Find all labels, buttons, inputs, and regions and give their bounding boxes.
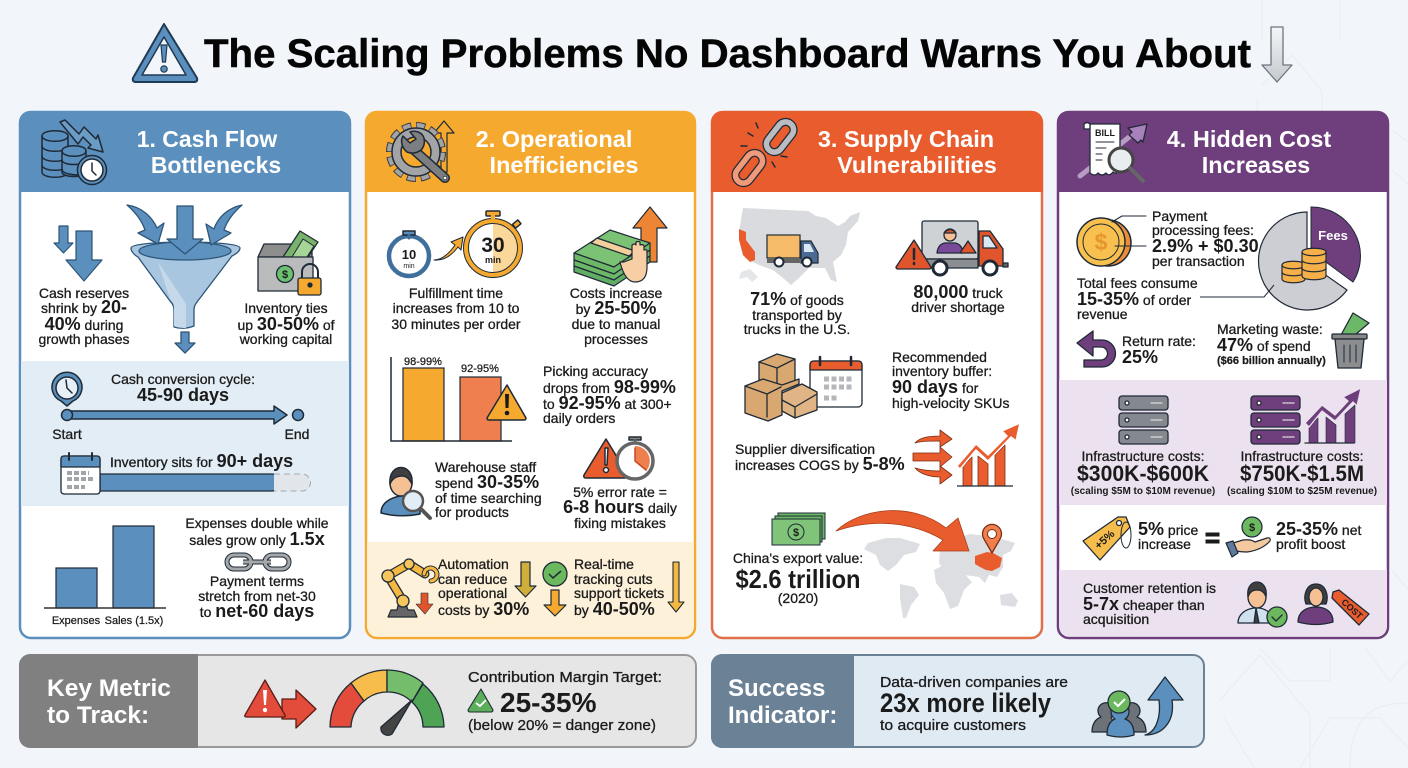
text: infrastructure costs 2: (scaling $10M to $25M revenue) — [1227, 486, 1377, 497]
text: picking accuracy: daily orders — [543, 410, 615, 426]
icon: locked inventory — [258, 231, 321, 295]
text: return rate: Return rate: — [1122, 333, 1196, 349]
text: supplier diversification: increases COGS by 5-8% — [735, 454, 905, 474]
text: real-time tracking: Real-time — [574, 556, 634, 572]
icon: world map — [864, 534, 1018, 618]
heading: cash flow — [137, 126, 281, 178]
text: infrastructure costs 1: (scaling $5M to $10M revenue) — [1071, 486, 1215, 497]
icon: clock pin — [52, 372, 82, 406]
progress bar — [100, 474, 310, 491]
arrow: to china — [836, 511, 969, 551]
text: warehouse staff: for products — [435, 504, 509, 520]
text: infrastructure costs 1 — [1071, 448, 1215, 497]
icon: stopwatches: 10 — [402, 247, 416, 262]
heading: key metric: to Track: — [47, 702, 149, 729]
panel: operational inefficiencies — [365, 111, 696, 638]
text: inventory ties: up 30-50% of — [237, 314, 335, 334]
text: total fees: revenue — [1077, 306, 1128, 322]
text: infrastructure costs 2: $750K-$1.5M — [1240, 461, 1364, 486]
icon: cash stack: $ — [793, 527, 799, 539]
heading: supply chain: Vulnerabilities — [837, 152, 997, 178]
text: danger zone: (below 20% = danger zone) — [468, 717, 656, 734]
icon: stopwatches: min — [485, 255, 501, 265]
text: china export: $2.6 trillion — [736, 564, 860, 594]
icon: calendar — [810, 357, 862, 407]
text: picking accuracy: drops from 98-99% — [543, 377, 676, 397]
timeline labels: End — [285, 426, 309, 442]
icon: server purple with chart — [1251, 388, 1361, 444]
icon: gear and wrench — [390, 121, 454, 180]
icon: coin: $ — [1095, 229, 1108, 255]
text: inventory buffer: inventory buffer: — [892, 363, 992, 379]
text: real-time tracking: tracking cuts — [574, 571, 653, 587]
text: price increase: 5% price — [1138, 519, 1198, 539]
panel: success indicator — [711, 654, 1204, 748]
bar chart: picking accuracy — [391, 356, 512, 441]
icon: map pin — [982, 524, 1002, 553]
text: cash reserves: growth phases — [38, 331, 130, 347]
icon: locked inventory: $ — [282, 269, 288, 281]
text: payment terms: to net-60 days — [200, 601, 314, 621]
icon: US map and truck — [739, 208, 860, 285]
text: china export: (2020) — [778, 590, 818, 606]
icon: price tag: +5% — [1093, 528, 1117, 552]
icon: down arrow — [1262, 27, 1292, 82]
text: infrastructure costs 2 — [1227, 448, 1377, 497]
pie chart: fees — [1200, 207, 1360, 310]
heading: cash flow: 1. Cash Flow — [137, 126, 277, 152]
text: marketing waste: Marketing waste: — [1217, 321, 1323, 337]
text: payment terms: stretch from net-30 — [198, 588, 316, 604]
icon: long down arrow — [668, 562, 684, 612]
text: fulfillment: 30 minutes per order — [391, 316, 521, 332]
panel: key metric — [19, 654, 696, 748]
icon: error timer — [584, 437, 653, 479]
text: total fees: 15-35% of order — [1077, 289, 1191, 309]
heading: success indicator: Success — [728, 675, 825, 702]
icon: bill and magnifier — [1080, 122, 1147, 181]
text: profit boost: profit boost — [1276, 536, 1345, 552]
text: trucks: transported by — [752, 307, 842, 323]
text: customer retention: 5-7x cheaper than — [1083, 594, 1205, 614]
heading: key metric: Key Metric — [47, 675, 171, 702]
icon: customers and cost tag — [1238, 582, 1369, 627]
text: infrastructure costs 2: Infrastructure costs: — [1241, 448, 1363, 464]
icon: coin — [1077, 216, 1146, 266]
icon: server gray — [1119, 396, 1168, 444]
bar chart: picking accuracy: 98-99% — [404, 356, 442, 368]
text: warehouse staff: spend 30-35% — [435, 472, 539, 492]
timeline labels: Start — [52, 426, 82, 442]
icon: bill and magnifier: BILL — [1095, 128, 1115, 138]
text: customer retention: acquisition — [1083, 611, 1149, 627]
icon: calendar — [61, 453, 100, 494]
text: infrastructure costs 1: Infrastructure costs: — [1082, 448, 1204, 464]
text: inventory buffer: Recommended — [892, 349, 987, 365]
icon: gold down arrow — [515, 562, 536, 597]
text: marketing waste: 47% of spend — [1217, 335, 1311, 355]
icon: warning triangle — [133, 24, 197, 82]
text: real-time tracking: by 40-50% — [574, 599, 655, 619]
text: customer retention: Customer retention is — [1083, 580, 1216, 596]
text: real-time tracking: support tickets — [574, 585, 664, 601]
text: processing fees: Payment — [1152, 208, 1207, 224]
icon: price tag — [1083, 517, 1131, 560]
text: data-driven: 23x more likely — [880, 688, 1051, 718]
icon: stopwatches: 30 — [481, 234, 505, 257]
text: payment terms: Payment terms — [210, 573, 304, 589]
heading: supply chain — [818, 126, 997, 178]
heading: hidden cost: 4. Hidden Cost — [1167, 126, 1331, 152]
text: error rate: fixing mistakes — [574, 515, 666, 531]
text: picking accuracy: Picking accuracy — [543, 363, 648, 379]
text: total fees: Total fees consume — [1077, 275, 1198, 291]
bar chart: picking accuracy: 92-95% — [461, 363, 499, 375]
text: trucks: trucks in the U.S. — [744, 321, 850, 337]
bar chart: expenses vs sales: Sales (1.5x) — [105, 615, 163, 627]
text: picking accuracy: to 92-95% at 300+ — [543, 393, 672, 413]
icon: cash stack — [772, 513, 825, 545]
heading: cash flow: Bottlenecks — [151, 152, 281, 178]
icon: truck driver shortage — [896, 221, 1008, 275]
icon: customers and cost tag: COST — [1339, 597, 1365, 621]
panel: cash flow bottlenecks — [19, 111, 351, 638]
metric value: 25-35% — [500, 687, 597, 718]
text: data-driven: to acquire customers — [880, 717, 1026, 734]
text: expenses double: Expenses double while — [185, 515, 329, 531]
text: return rate: 25% — [1122, 347, 1158, 367]
icon: hand with coin — [1226, 517, 1270, 557]
text: price increase: increase — [1138, 536, 1191, 552]
text: expenses double: sales grow only 1.5x — [189, 529, 325, 549]
text: inventory buffer: high-velocity SKUs — [892, 395, 1010, 411]
heading: supply chain: 3. Supply Chain — [818, 126, 994, 152]
text: inventory buffer: 90 days for — [892, 377, 978, 397]
text: contribution margin: Contribution Margin Target: — [468, 669, 662, 686]
icon: check triangle — [468, 689, 493, 712]
heading: hidden cost — [1167, 126, 1331, 178]
text: processing fees: 2.9% + $0.30 — [1152, 236, 1259, 256]
text: costs increase: processes — [584, 331, 648, 347]
panel: hidden cost increases — [1057, 111, 1389, 638]
heading: operational: Inefficiencies — [490, 152, 638, 178]
text: cash reserves: shrink by 20- — [41, 297, 127, 317]
text: automation: costs by 30% — [438, 599, 529, 619]
text: china export: China's export value: — [733, 550, 863, 566]
text: inventory ties: working capital — [239, 331, 332, 347]
text: warehouse staff: of time searching — [435, 490, 542, 506]
icon: coins and clock — [42, 120, 106, 184]
icon: team and growth arrow — [1092, 677, 1183, 737]
icon: diverging arrows and chart — [913, 423, 1020, 486]
icon: return arrow — [1077, 331, 1116, 367]
text: costs increase: due to manual — [572, 316, 660, 332]
text: processing fees: processing fees: — [1152, 222, 1254, 238]
icon: hand with coin: $ — [1249, 522, 1255, 534]
icon: cash and hand — [574, 207, 667, 286]
pie chart: fees: Fees — [1318, 228, 1348, 243]
icon: broken chain — [732, 119, 797, 186]
bar chart: expenses vs sales — [44, 526, 166, 627]
icon: staff searching — [381, 468, 430, 518]
text: cash reserves: Cash reserves — [39, 285, 129, 301]
text: costs increase: Costs increase — [570, 285, 663, 301]
bar chart: expenses vs sales: Expenses — [52, 615, 101, 627]
text: trucks: 71% of goods — [750, 289, 844, 309]
text: inventory ties: Inventory ties — [244, 300, 328, 316]
text: china export — [733, 550, 863, 606]
text: driver shortage: 80,000 truck — [913, 282, 1003, 302]
icon: down arrows — [54, 226, 102, 281]
heading: success indicator: Indicator: — [728, 702, 837, 729]
text: data-driven — [880, 674, 1068, 734]
icon: check circle — [543, 562, 567, 586]
icon: warning — [487, 385, 526, 420]
text: fulfillment: increases from 10 to — [393, 300, 520, 316]
text: supplier diversification: Supplier diversification — [735, 441, 875, 457]
icon: robot arm — [382, 559, 437, 617]
text: automation: Automation — [438, 556, 509, 572]
heading: operational: 2. Operational — [476, 126, 632, 152]
heading: operational — [476, 126, 638, 178]
text: cash reserves: 40% during — [45, 314, 123, 334]
text: costs increase: by 25-50% — [576, 298, 656, 318]
icon: down arrow — [544, 590, 566, 616]
panel: supply chain vulnerabilities — [711, 111, 1043, 638]
text: automation: operational — [438, 585, 507, 601]
text: infrastructure costs 1: $300K-$600K — [1077, 461, 1209, 486]
icon: warning arrow — [245, 680, 316, 728]
text: inventory sits: 90+ days — [217, 451, 293, 471]
icon: boxes — [745, 354, 817, 421]
text: fulfillment: Fulfillment time — [409, 285, 503, 301]
text: automation: can reduce — [438, 571, 507, 587]
timeline arrow — [62, 406, 304, 424]
equals sign — [1206, 533, 1219, 543]
gauge — [330, 670, 444, 735]
text: warehouse staff: Warehouse staff — [435, 459, 536, 475]
heading: hidden cost: Increases — [1202, 152, 1310, 178]
text: error rate: 6-8 hours daily — [563, 497, 677, 517]
icon: funnel — [127, 205, 242, 353]
text: cash conversion cycle: 45-90 days — [137, 385, 229, 405]
icon: trash and cash — [1332, 313, 1369, 368]
text: driver shortage: driver shortage — [911, 299, 1005, 315]
icon: stopwatches: min — [403, 263, 415, 270]
text: error rate: 5% error rate = — [573, 484, 667, 500]
text: inventory sits: Inventory sits for — [110, 454, 217, 470]
text: cash conversion cycle: Cash conversion cycle: — [111, 371, 255, 387]
text: profit boost: 25-35% net — [1276, 519, 1361, 539]
text: data-driven: Data-driven companies are — [880, 674, 1068, 691]
text: marketing waste: ($66 billion annually) — [1217, 355, 1326, 367]
text: processing fees: per transaction — [1152, 253, 1245, 269]
icon: chain — [227, 555, 289, 569]
icon: stopwatches — [389, 211, 522, 278]
title: The Scaling Problems No Dashboard Warns You About — [204, 32, 1251, 76]
